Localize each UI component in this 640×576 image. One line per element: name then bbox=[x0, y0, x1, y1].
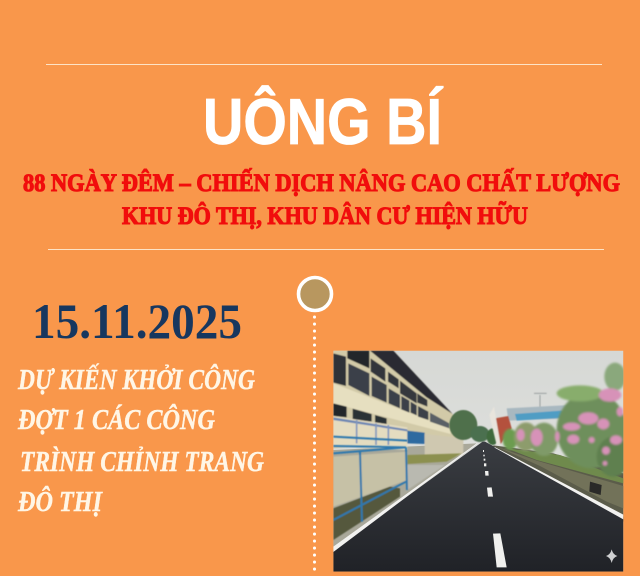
title: UÔNG BÍ bbox=[203, 85, 444, 158]
description text: ĐỢT 1 CÁC CÔNG bbox=[17, 405, 215, 436]
date: 15.11.2025 bbox=[32, 293, 242, 349]
ramp and railing bbox=[333, 437, 462, 540]
description text: DỰ KIẾN KHỞI CÔNG bbox=[17, 364, 255, 396]
subtitle: KHU ĐÔ THỊ, KHU DÂN CƯ HIỆN HỮU bbox=[122, 201, 528, 230]
distant trees bbox=[449, 410, 499, 445]
description text: ĐÔ THỊ bbox=[17, 487, 103, 518]
building bbox=[333, 351, 463, 458]
subtitle bbox=[23, 168, 620, 230]
flowering bushes bbox=[503, 363, 630, 477]
ground under the bushes and curb bbox=[493, 445, 623, 522]
ground left of the road bbox=[333, 443, 477, 553]
photo: newly paved road beside a building and flowering bushes bbox=[333, 351, 630, 572]
centre dashes bbox=[483, 450, 507, 567]
sparkle watermark bbox=[606, 549, 617, 563]
timeline with dotted line and circle marker bbox=[298, 278, 332, 576]
road edge lines bbox=[333, 443, 478, 552]
background bridge bbox=[489, 393, 570, 445]
description text bbox=[17, 364, 264, 518]
road bbox=[333, 442, 623, 572]
description text: TRÌNH CHỈNH TRANG bbox=[20, 447, 264, 478]
